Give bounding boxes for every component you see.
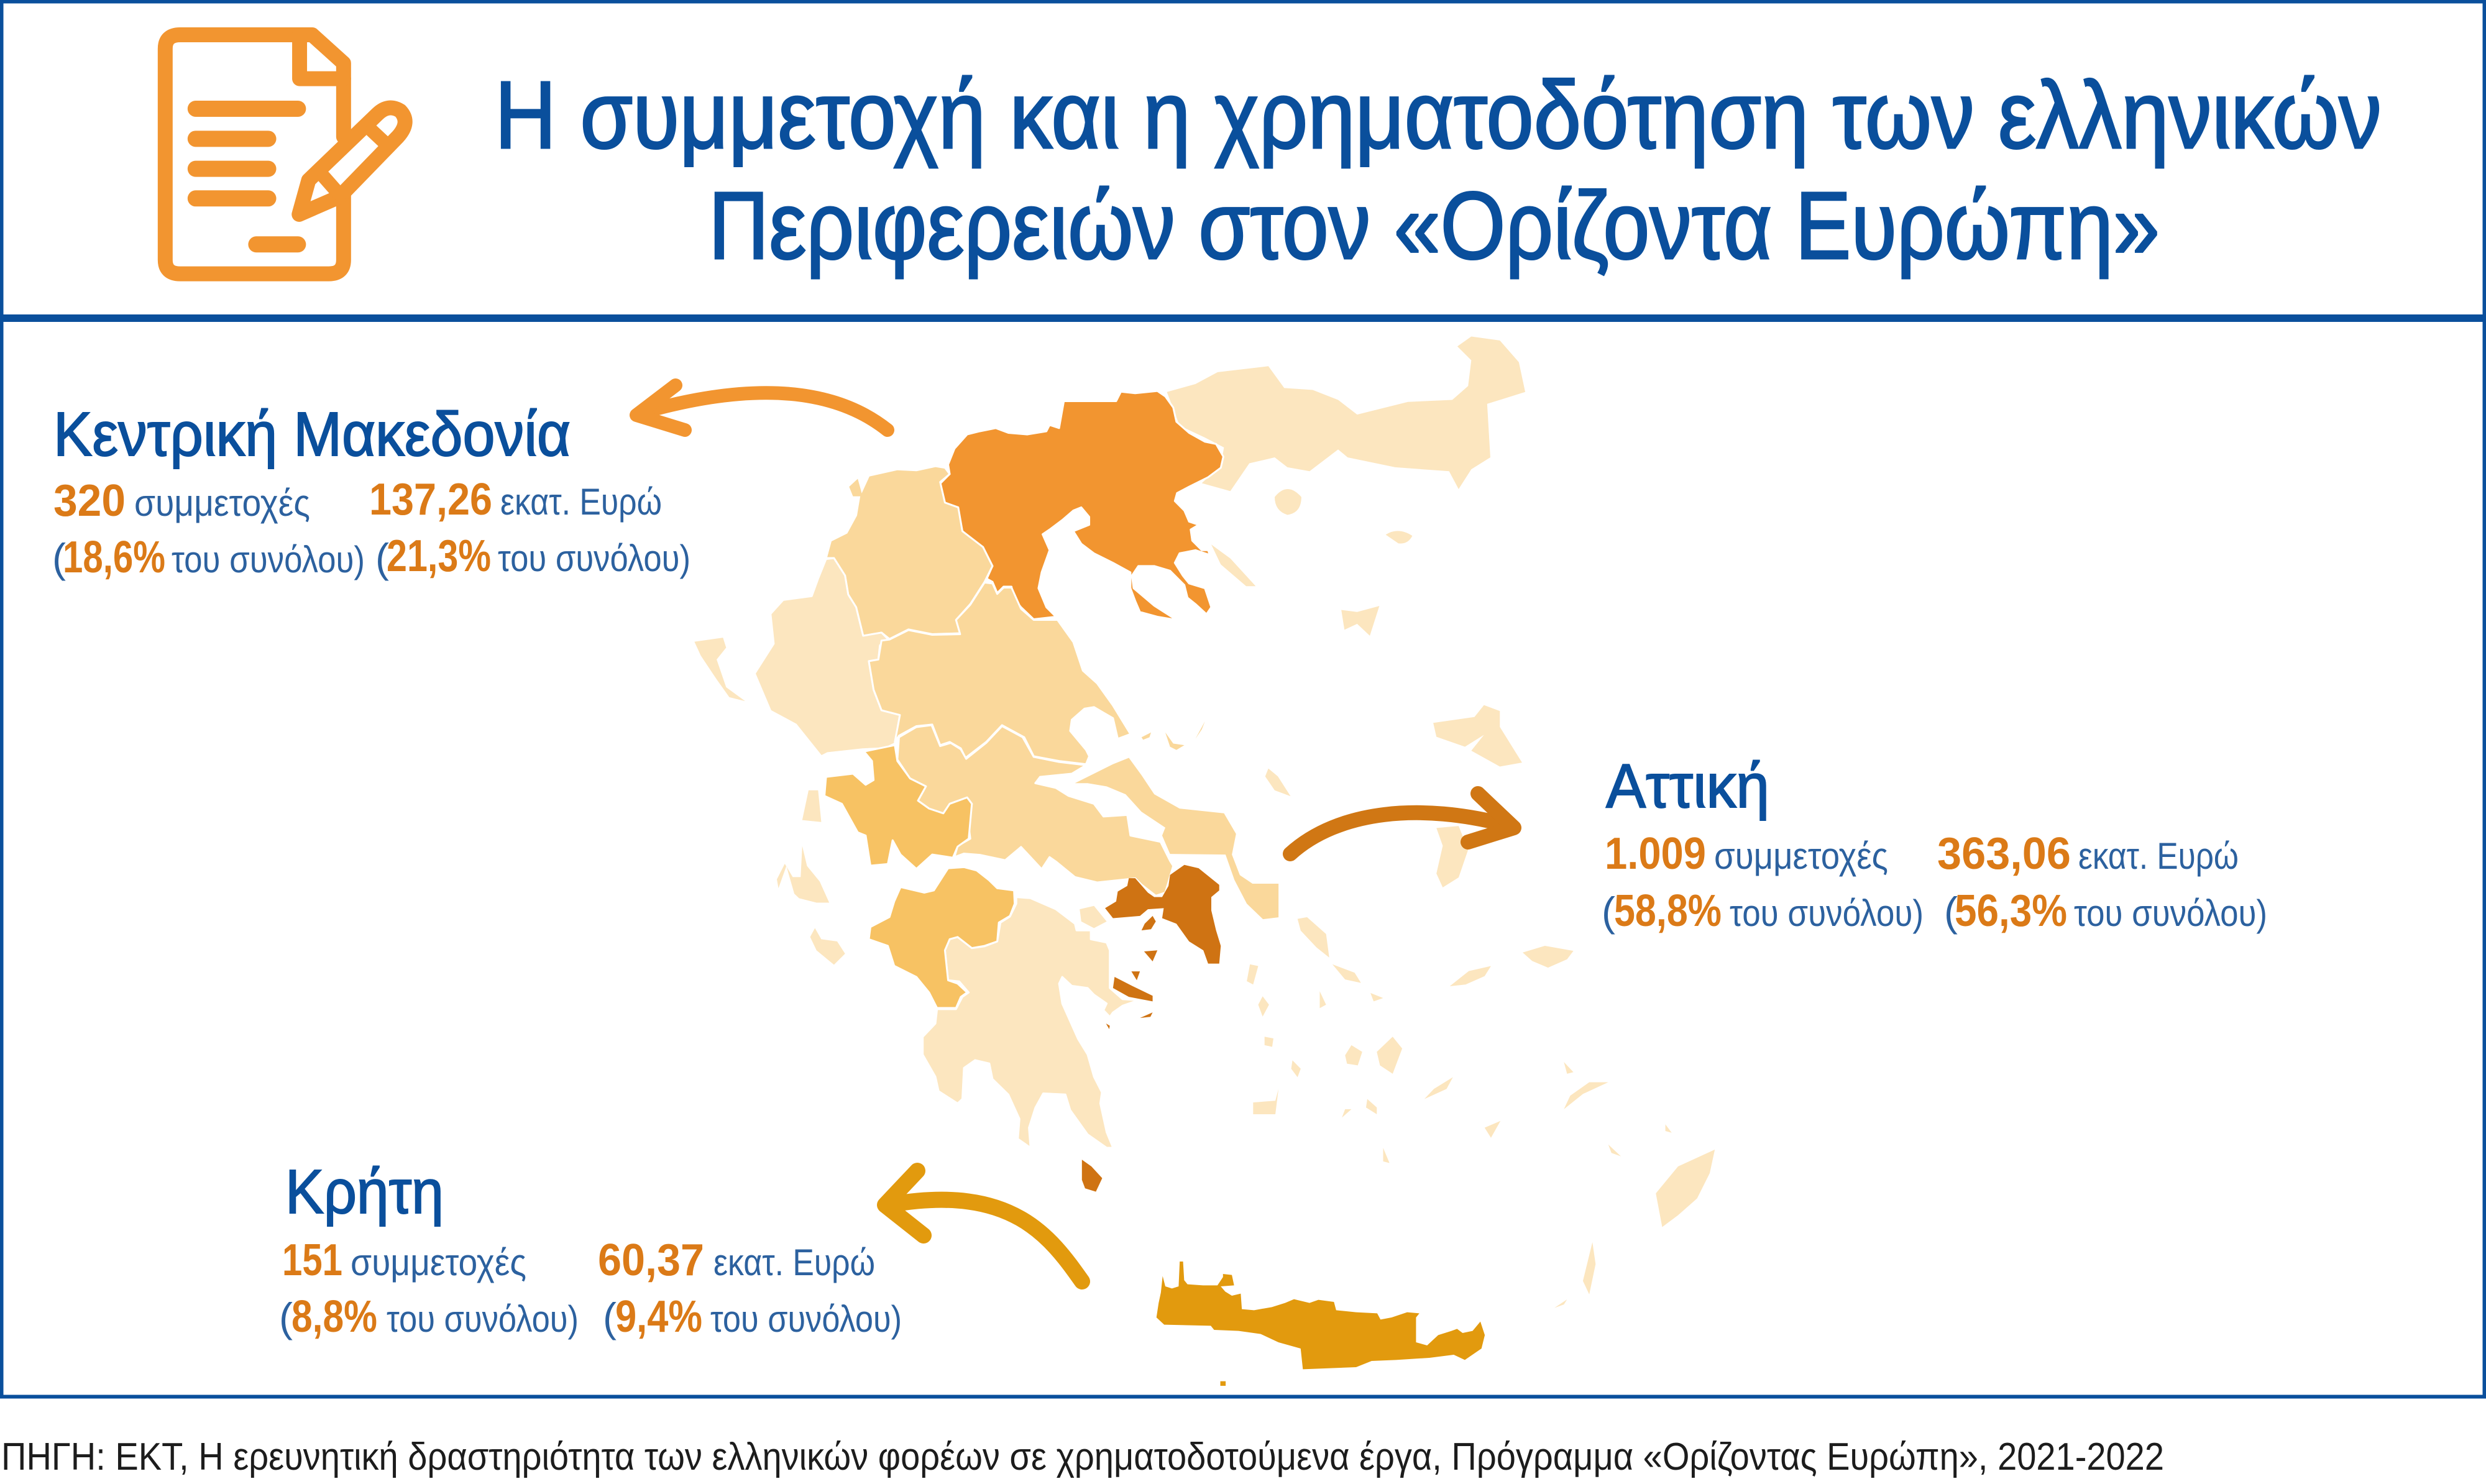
participations: του συνόλου) <box>172 539 365 580</box>
region: Corinthia patch <box>1080 906 1107 928</box>
participations: 8,8% <box>291 1292 377 1342</box>
funding: ( <box>603 1294 617 1340</box>
region: Crete <box>1157 1262 1485 1386</box>
funding: 21,3% <box>387 531 491 581</box>
region: Prespa lakeside patch <box>849 479 863 497</box>
arrow: Attica <box>1290 794 1514 854</box>
icon: document with pencil <box>165 35 405 274</box>
participations: του συνόλου) <box>387 1298 579 1340</box>
region: Central Macedonia <box>940 391 1223 620</box>
funding: εκατ. Ευρώ <box>713 1242 875 1283</box>
title <box>495 62 2382 279</box>
funding: του συνόλου) <box>498 538 690 579</box>
participations: ( <box>279 1294 293 1340</box>
callout: Crete <box>279 1157 902 1342</box>
region: Evia <box>1075 758 1278 919</box>
participations: 1.009 <box>1605 829 1706 879</box>
participations: 18,6% <box>63 533 165 582</box>
heading: Κρήτη <box>285 1157 444 1227</box>
callout: Central Macedonia <box>52 400 690 582</box>
map of Greece: Peloponnese and Attica <box>777 846 1221 1148</box>
title: Περιφερειών στον «Ορίζοντα Ευρώπη» <box>709 172 2160 279</box>
participations: συμμετοχές <box>1714 835 1888 877</box>
region: Kythera <box>1082 1160 1102 1192</box>
funding: του συνόλου) <box>2074 892 2267 934</box>
participations <box>1602 829 1924 936</box>
islands: Kefalonia and Zakynthos <box>777 846 845 964</box>
funding: 137,26 <box>369 475 492 524</box>
callout: Attica <box>1602 751 2267 936</box>
funding: εκατ. Ευρώ <box>500 481 662 523</box>
arrow: Crete <box>885 1171 1082 1281</box>
participations: 320 <box>53 476 126 526</box>
funding: 9,4% <box>615 1292 702 1342</box>
funding: ( <box>375 535 389 581</box>
funding: 60,37 <box>598 1235 704 1285</box>
participations: συμμετοχές <box>134 482 310 524</box>
participations: ( <box>1602 889 1615 935</box>
funding: του συνόλου) <box>710 1298 902 1340</box>
region: Western Greece (mainland) <box>825 745 972 869</box>
participations: συμμετοχές <box>351 1242 526 1283</box>
region: East Macedonia and Thrace <box>1167 336 1525 586</box>
region: Western Greece (Peloponnese) <box>869 867 1015 1008</box>
arrow: Central Macedonia <box>636 385 888 430</box>
islands: Sporades <box>1142 721 1205 750</box>
region: Central Greece <box>897 725 1173 895</box>
funding: 56,3% <box>1955 886 2067 936</box>
heading: Κεντρική Μακεδονία <box>53 400 571 469</box>
funding <box>1937 829 2267 936</box>
region: Attica <box>1105 865 1221 1029</box>
participations: ( <box>52 535 66 581</box>
region: Epirus <box>755 558 900 756</box>
region: Western Macedonia <box>826 466 993 639</box>
islands: Cyclades and Dodecanese <box>1247 917 1715 1308</box>
funding: 363,06 <box>1937 829 2071 879</box>
funding <box>598 1235 902 1342</box>
funding: εκατ. Ευρώ <box>2078 835 2239 877</box>
heading: Αττική <box>1606 751 1769 821</box>
source note: ΠΗΓΗ: ΕΚΤ, Η ερευνητική δραστηριότητα των ελληνικών φορέων σε χρηματοδοτούμενα έργα, Πρόγραμμα «Ορίζοντας Ευρώπη», 2021-2022 <box>1 1436 2164 1478</box>
participations: του συνόλου) <box>1730 892 1924 934</box>
participations: 58,8% <box>1614 886 1722 936</box>
region: Thessaly <box>869 582 1131 764</box>
map of Greece: north-east and northern islands <box>694 336 1525 887</box>
participations <box>279 1235 579 1342</box>
map of Greece: mainland <box>755 391 1278 919</box>
funding: ( <box>1944 889 1958 935</box>
funding <box>369 475 690 581</box>
islands: Corfu and North Aegean <box>694 606 1522 887</box>
region: Peloponnese <box>923 897 1139 1148</box>
map of Greece: Aegean islands <box>1082 917 1715 1308</box>
participations: 151 <box>282 1235 342 1285</box>
participations <box>52 476 365 582</box>
